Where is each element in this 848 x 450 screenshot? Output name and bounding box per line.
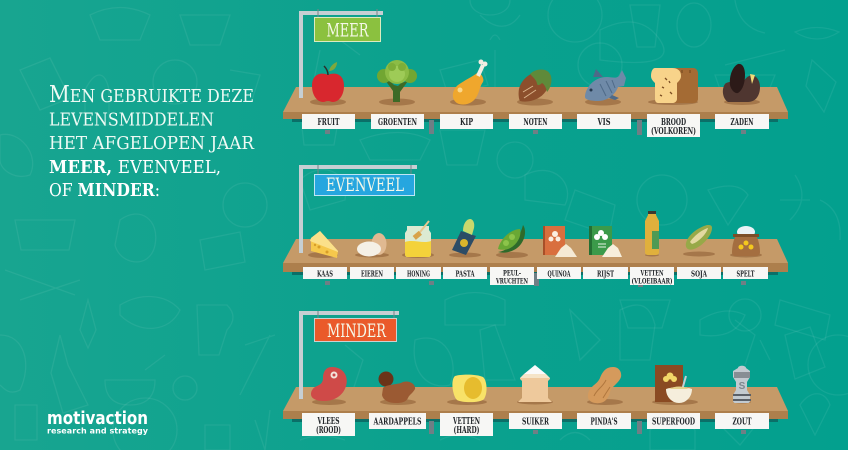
icon: pasta: [449, 219, 481, 258]
icon: chicken leg: [450, 60, 488, 106]
title text: LEVENSMIDDELEN: [49, 110, 214, 130]
sign post: [301, 167, 417, 253]
icon: bread: [648, 68, 698, 105]
label: zaden: ZADEN: [730, 117, 754, 128]
pegs: [325, 273, 746, 287]
sign post: [301, 13, 383, 98]
label: brood (volkoren): (VOLKOREN): [651, 126, 696, 137]
label: noten: NOTEN: [524, 117, 548, 128]
label: vis: [577, 114, 631, 129]
label: quinoa: [537, 267, 581, 279]
label: noten: [509, 114, 562, 129]
label: zaden: [715, 114, 769, 129]
sign: evenveel: [314, 165, 414, 196]
label: brood (volkoren): [647, 114, 700, 137]
label: pasta: [443, 267, 487, 279]
icon: hazelnut: [517, 70, 553, 106]
icon: peanut: [587, 367, 623, 405]
label: peulvruchten: VRUCHTEN: [495, 276, 528, 286]
sign: minder: [314, 311, 396, 342]
icon: soybean: [683, 225, 715, 256]
icon: seeds: [723, 64, 760, 105]
label: suiker: [509, 413, 562, 429]
logo: motivaction: [47, 408, 149, 436]
label: spelt: SPELT: [736, 268, 755, 278]
icon: butter: [447, 375, 487, 405]
panel: minder shelf: [283, 311, 788, 436]
label: vetten (hard): [440, 413, 493, 436]
panel: evenveel shelf: [283, 165, 788, 287]
shelf board: [283, 387, 788, 422]
label: eieren: EIEREN: [361, 268, 383, 278]
label: peulvruchten: [490, 267, 534, 286]
icon: spelt sack: [730, 226, 762, 258]
sign: meer: [314, 9, 380, 42]
label: fruit: FRUIT: [318, 117, 340, 128]
sign: evenveel: EVENVEEL: [326, 174, 404, 196]
label: zout: [715, 413, 769, 429]
label: groenten: GROENTEN: [378, 117, 417, 128]
pegs: [325, 120, 746, 135]
icon: superfood: [652, 365, 698, 405]
logo: motivaction: research and strategy: [47, 426, 149, 436]
label: vetten (vloeibaar): [630, 267, 674, 286]
label: vetten (vloeibaar): (VLOEIBAAR): [632, 276, 672, 286]
title text: MEN GEBRUIKTE DEZE: [49, 82, 254, 108]
label: kip: [440, 114, 493, 129]
label: kip: KIP: [460, 117, 473, 128]
icon: apple: [310, 62, 346, 106]
label: soja: SOJA: [691, 268, 707, 278]
icon: honey jar: [402, 221, 434, 258]
icon: cheese: [308, 231, 338, 258]
label: vlees (rood): [302, 413, 355, 436]
label: spelt: [723, 267, 768, 279]
icon: peas: [496, 225, 528, 258]
label: rijst: RIJST: [597, 268, 615, 278]
icon: quinoa: [543, 226, 577, 257]
sign: meer: MEER: [326, 20, 369, 42]
label: honing: HONING: [407, 268, 430, 278]
label: peulvruchten: PEUL-: [503, 268, 521, 278]
title text: MEER, EVENVEEL,: [49, 157, 221, 178]
label: pasta: PASTA: [456, 268, 475, 278]
label: aardappels: [369, 413, 426, 429]
title text: [49, 82, 254, 201]
icon: salt shaker: [733, 366, 751, 404]
shelf board: [283, 239, 788, 275]
sign post: [301, 313, 399, 399]
label: vetten (hard): VETTEN: [452, 416, 480, 427]
icon: potatoes: [378, 372, 416, 405]
label: groenten: [371, 114, 424, 129]
label: quinoa: QUINOA: [548, 268, 571, 278]
label: pinda's: PINDA'S: [590, 416, 618, 428]
label: eieren: [350, 267, 394, 279]
label: kaas: KAAS: [317, 268, 333, 278]
icon: fish: [585, 69, 626, 106]
icon: red meat: [311, 367, 347, 405]
pegs: [429, 421, 746, 434]
label: vetten (vloeibaar): VETTEN: [640, 268, 664, 278]
label: vetten (hard): (HARD): [454, 425, 480, 436]
label: rijst: [583, 267, 628, 279]
icon: eggs: [355, 233, 389, 258]
shelf board: [283, 87, 788, 122]
label: honing: [396, 267, 441, 279]
title text: HET AFGELOPEN JAAR: [49, 133, 254, 154]
label: kaas: [303, 267, 347, 279]
title text: OF MINDER:: [49, 180, 160, 201]
label: fruit: [302, 114, 355, 129]
label: pinda's: [577, 413, 631, 429]
panel: meer shelf: [283, 9, 788, 137]
icon: oil bottle: [645, 211, 659, 256]
label: superfood: SUPERFOOD: [652, 416, 695, 428]
label: aardappels: AARDAPPELS: [373, 416, 422, 428]
icon: broccoli: [377, 60, 417, 106]
sign: minder: MINDER: [327, 320, 386, 342]
icon: sugar sack: [517, 365, 553, 404]
icon: salt shaker: S: [739, 381, 746, 392]
label: suiker: SUIKER: [522, 416, 549, 428]
label: superfood: [647, 413, 700, 429]
label: vlees (rood): VLEES: [317, 416, 340, 427]
label: vis: VIS: [597, 117, 611, 128]
logo: motivaction: motivaction: [47, 408, 148, 429]
label: soja: [677, 267, 721, 279]
label: brood (volkoren): BROOD: [661, 117, 686, 128]
icon: rice: [589, 226, 622, 257]
label: zout: ZOUT: [732, 416, 752, 428]
label: vlees (rood): (ROOD): [316, 425, 341, 436]
